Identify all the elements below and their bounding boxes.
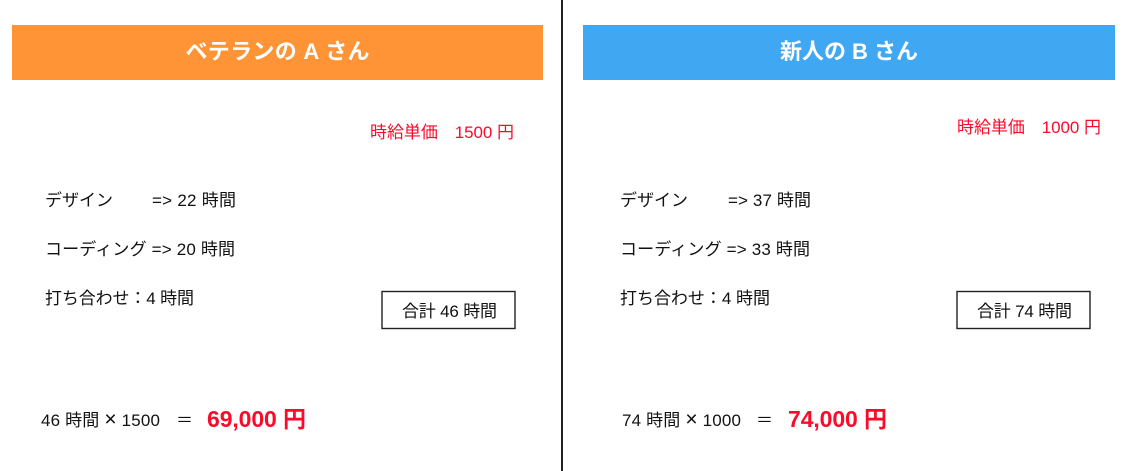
calculation B: 74 時間 × 1000 [622,408,741,431]
center divider line [561,0,563,471]
calculation A: 46 時間 × 1500 [41,408,160,431]
calculation B: 74,000 円 [788,406,887,432]
panel: newcomer B [583,25,1115,432]
coding hours B: コーディング => 33 時間 [620,239,810,259]
total box A: 合計 46 時間 [402,302,497,321]
header bar: newcomer B [583,25,1115,80]
design hours A: デザイン [45,190,113,210]
design hours B: デザイン [620,190,688,210]
header bar: veteran A [12,25,543,80]
design hours A [45,190,236,210]
meeting hours A: 打ち合わせ：4 時間 [45,289,194,308]
design hours B: => 37 時間 [728,191,811,210]
total box B [957,292,1090,328]
total box B: 合計 74 時間 [977,302,1072,321]
header bar: veteran A: ベテランの A さん [186,39,370,64]
calculation A: ＝ [176,411,193,430]
calculation A [41,406,306,432]
panel: veteran A [12,25,543,432]
design hours B [620,190,811,210]
hourly rate A: 時給単価 1500 円 [370,123,514,142]
meeting hours B: 打ち合わせ：4 時間 [620,289,770,308]
coding hours A: コーディング => 20 時間 [45,239,235,259]
hourly rate B: 時給単価 1000 円 [957,118,1101,137]
total box A [382,292,515,328]
design hours A: => 22 時間 [152,191,236,210]
header bar: newcomer B: 新人の B さん [780,39,918,64]
calculation A: 69,000 円 [207,406,306,432]
calculation B: ＝ [756,411,773,430]
calculation B [622,406,887,432]
